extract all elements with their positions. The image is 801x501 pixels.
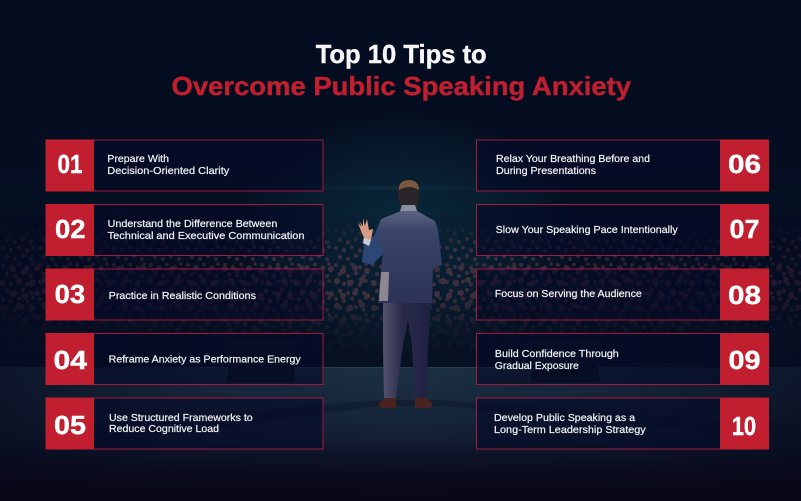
- jacket: [376, 211, 442, 303]
- tip 05: Use Structured Frameworks to: [109, 412, 253, 424]
- title: [172, 39, 632, 101]
- tip 01: Decision-Oriented Clarity: [107, 165, 230, 177]
- trousers: [383, 302, 431, 398]
- tip 09: Build Confidence Through: [495, 348, 619, 360]
- stage monitor right: [530, 342, 601, 383]
- tip 09: 09: [728, 347, 760, 375]
- tip 06: Relax Your Breathing Before and: [496, 153, 650, 165]
- tip 01: 01: [58, 151, 82, 179]
- stage monitor left: [225, 342, 296, 383]
- tip 05: 05: [54, 412, 86, 440]
- tip 08: Focus on Serving the Audience: [495, 288, 642, 300]
- tip 02: 02: [55, 216, 86, 244]
- tip 10: Develop Public Speaking as a: [494, 412, 635, 424]
- tip 03: 03: [55, 281, 85, 309]
- tip 03: Practice in Realistic Conditions: [109, 290, 256, 302]
- tip 02: Understand the Difference Between: [108, 218, 277, 230]
- tip 07: [476, 204, 769, 256]
- tip 05: Reduce Cognitive Load: [109, 423, 219, 435]
- tip 08: [476, 268, 769, 320]
- tip 07: 07: [730, 216, 760, 244]
- tip 06: [476, 140, 769, 192]
- tip 03: [46, 268, 323, 320]
- tip 08: 08: [728, 282, 761, 310]
- tip 04: [46, 333, 323, 385]
- tip 06: During Presentations: [496, 165, 596, 177]
- tip 01: Prepare With: [107, 153, 169, 165]
- left arm and cuff: [362, 219, 385, 265]
- hand: [358, 218, 373, 240]
- stage floor: [0, 367, 801, 501]
- tip 07: Slow Your Speaking Pace Intentionally: [496, 224, 678, 236]
- tip 02: [46, 204, 323, 256]
- audience crowd: [0, 226, 801, 338]
- tip 06: 06: [728, 151, 761, 179]
- jacket light patch: [379, 272, 389, 301]
- title accent line: Overcome Public Speaking Anxiety: [172, 71, 632, 101]
- tip 09: [476, 333, 769, 385]
- tip 05: [46, 398, 323, 450]
- head: [398, 180, 419, 209]
- tip 09: Gradual Exposure: [495, 360, 579, 372]
- title: Top 10 Tips to: [316, 39, 487, 69]
- tip 10: Long-Term Leadership Strategy: [494, 424, 646, 436]
- floor shadow: [95, 400, 800, 445]
- speaker figure: [358, 180, 442, 408]
- background: arena scene: [0, 132, 801, 464]
- shoes: [379, 398, 432, 408]
- tip 10: [476, 398, 769, 450]
- tip 02: Technical and Executive Communication: [108, 230, 305, 242]
- tip 10: 10: [732, 413, 756, 441]
- tip 04: Reframe Anxiety as Performance Energy: [109, 353, 301, 365]
- tip 01: [46, 140, 323, 192]
- tip 04: 04: [54, 347, 88, 375]
